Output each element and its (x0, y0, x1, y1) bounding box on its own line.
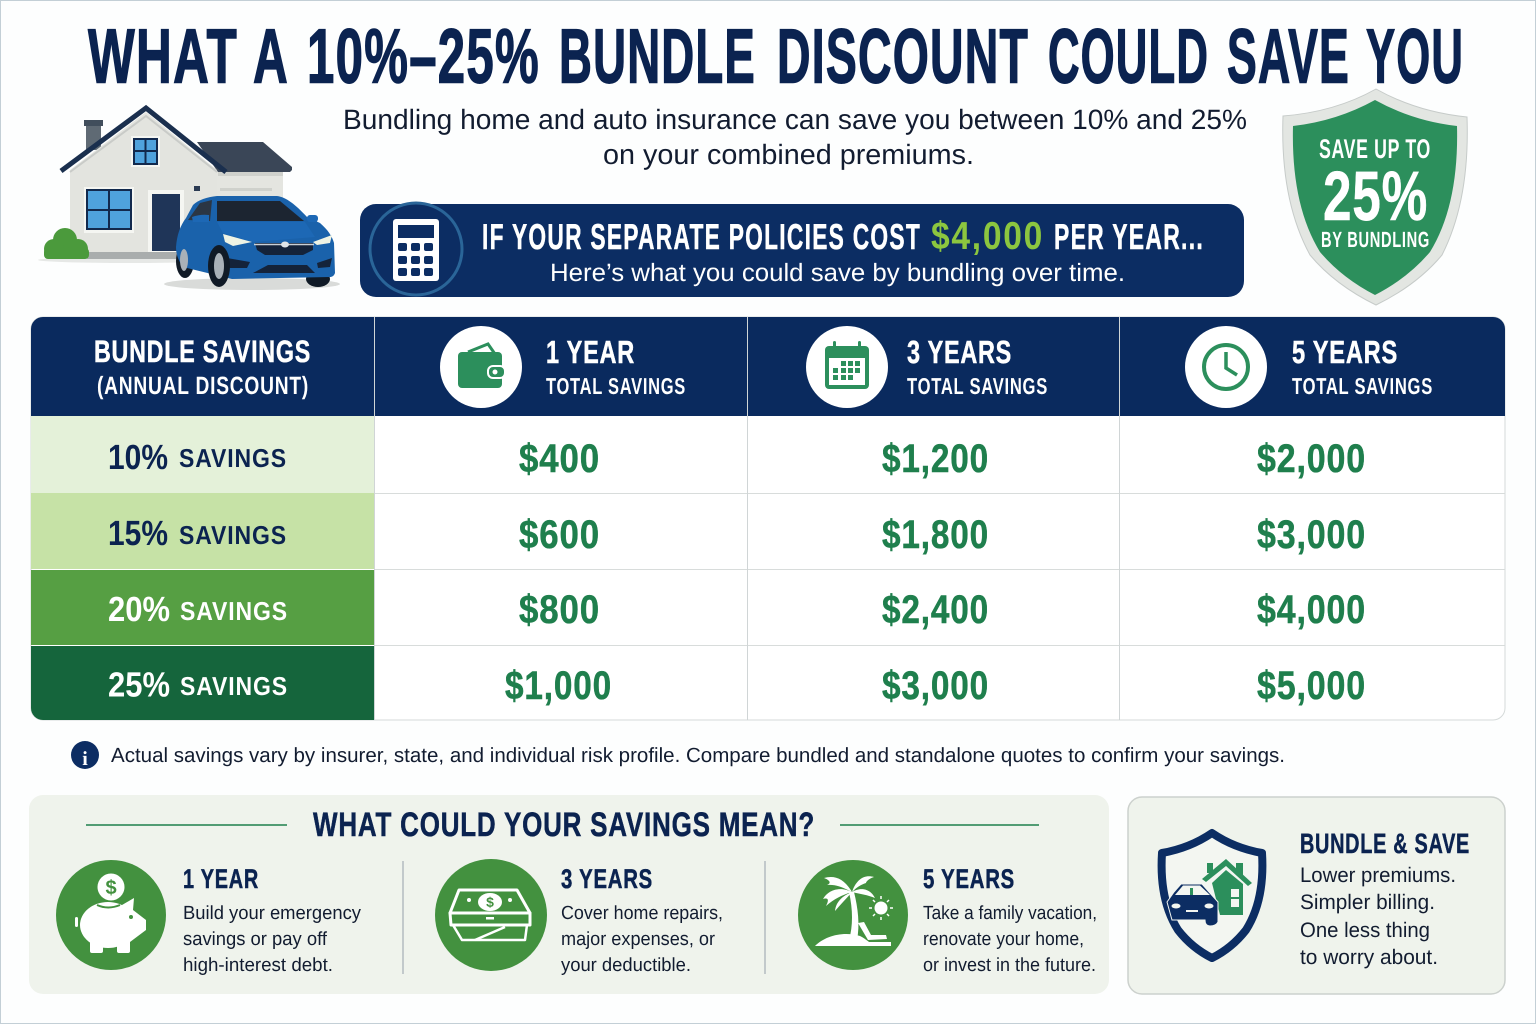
item: 5 years (798, 860, 1097, 976)
row: 20% savings: 20% (108, 590, 170, 629)
header: bundle savings: (ANNUAL DISCOUNT) (97, 372, 309, 400)
item: 3 years: your deductible. (561, 955, 691, 976)
row: 25% savings: $1,000 (505, 664, 612, 708)
header: 1 year: TOTAL SAVINGS (546, 373, 686, 399)
icon: calendar (825, 341, 869, 389)
banner headline: PER YEAR... (1054, 216, 1204, 257)
row: 25% savings: SAVINGS (180, 671, 288, 701)
row: 10% savings: $1,200 (882, 437, 989, 481)
icon: palm tree island (815, 876, 893, 946)
panel: bundle and save: One less thing (1300, 919, 1430, 942)
item: 1 year: savings or pay off (183, 929, 328, 950)
disclaimer note: Actual savings vary by insurer, state, and individual risk profile. Compare bundled and standalone quotes to confirm your savings. (111, 744, 1285, 767)
icon: house and car (38, 108, 340, 290)
row: 20% savings (108, 588, 1366, 632)
header: 5 years (1185, 326, 1433, 408)
header: 5 years: 5 YEARS (1292, 334, 1398, 370)
item: 5 years: 5 YEARS (923, 864, 1015, 894)
item: 1 year: 1 YEAR (183, 864, 259, 894)
item: 1 year: high-interest debt. (183, 955, 333, 976)
panel: bundle and save (1128, 797, 1505, 994)
title: SAVE (1227, 14, 1350, 100)
header: 3 years (806, 326, 1048, 408)
row: 15% savings: 15% (108, 514, 168, 553)
subtitle: Bundling home and auto insurance can save you between 10% and 25% (343, 104, 1247, 135)
item: 3 years: major expenses, or (561, 929, 716, 950)
title: DISCOUNT (777, 14, 1029, 100)
row: 10% savings: SAVINGS (179, 443, 287, 473)
disclaimer note: i (82, 748, 88, 770)
row: 25% savings: 25% (108, 666, 170, 704)
banner subline: Here’s what you could save by bundling over time. (550, 259, 1125, 287)
badge: save up to 25%: SAVE UP TO (1319, 134, 1431, 164)
icon: piggy bank (75, 874, 146, 953)
icon: cash stack (450, 890, 530, 940)
savings table (31, 317, 1505, 720)
item: 3 years: Cover home repairs, (561, 903, 723, 924)
title: A (253, 14, 289, 100)
row: 15% savings: $3,000 (1257, 513, 1366, 557)
header: 5 years: TOTAL SAVINGS (1292, 373, 1433, 399)
item: 5 years: or invest in the future. (923, 955, 1096, 976)
row: 20% savings: SAVINGS (180, 596, 288, 626)
badge: save up to 25% (1283, 89, 1467, 305)
icon: piggy bank: $ (105, 877, 117, 899)
row: 15% savings (108, 513, 1366, 557)
header: 3 years: TOTAL SAVINGS (907, 373, 1048, 399)
item: 1 year: Build your emergency (183, 903, 361, 924)
row: 10% savings: $400 (519, 437, 600, 481)
panel: bundle and save: to worry about. (1300, 946, 1438, 969)
subtitle (343, 104, 1247, 170)
panel: bundle and save: BUNDLE & SAVE (1300, 828, 1470, 859)
header: 3 years: 3 YEARS (907, 334, 1012, 370)
panel: bundle and save: Lower premiums. (1300, 864, 1456, 887)
badge: save up to 25%: 25% (1323, 157, 1428, 235)
row: 15% savings: $1,800 (882, 513, 989, 557)
subtitle: on your combined premiums. (603, 139, 974, 170)
header: 1 year: 1 YEAR (546, 334, 635, 370)
banner headline: $4,000 (931, 215, 1044, 258)
row: 25% savings (108, 664, 1366, 708)
title: BUNDLE (559, 14, 756, 100)
panel: bundle and save: Simpler billing. (1300, 891, 1435, 914)
item: 3 years: 3 YEARS (561, 864, 653, 894)
row: 15% savings: $600 (519, 513, 600, 557)
row: 20% savings: $4,000 (1257, 588, 1366, 632)
panel: cost banner (360, 203, 1244, 297)
row: 10% savings: $2,000 (1257, 437, 1366, 481)
row: 25% savings: $3,000 (882, 664, 989, 708)
icon: calculator (370, 203, 462, 295)
header: bundle savings (94, 334, 311, 400)
item: 5 years: renovate your home, (923, 929, 1084, 950)
icon: cash stack: $ (486, 894, 494, 910)
header: bundle savings: BUNDLE SAVINGS (94, 334, 311, 369)
banner headline: IF YOUR SEPARATE POLICIES COST (482, 216, 921, 257)
section heading: WHAT COULD YOUR SAVINGS MEAN? (313, 806, 815, 844)
item: 5 years: Take a family vacation, (923, 903, 1097, 924)
row: 10% savings (108, 437, 1366, 481)
title: COULD (1048, 14, 1209, 100)
row: 20% savings: $800 (519, 588, 600, 632)
row: 25% savings: $5,000 (1257, 664, 1366, 708)
icon: shield with house and car (1162, 833, 1262, 958)
item: 3 years (435, 859, 723, 976)
title: WHAT (88, 14, 238, 100)
row: 10% savings: 10% (108, 438, 168, 477)
row: 15% savings: SAVINGS (179, 520, 287, 550)
item: 1 year (56, 860, 361, 976)
title (88, 14, 1464, 100)
icon: wallet (458, 344, 505, 388)
header: 1 year (440, 326, 686, 408)
row: 20% savings: $2,400 (882, 588, 989, 632)
panel: what could your savings mean (29, 795, 1109, 994)
icon: clock (1204, 345, 1248, 389)
title: YOU (1366, 14, 1464, 100)
badge: save up to 25%: BY BUNDLING (1321, 227, 1430, 252)
title: 10%–25% (307, 14, 540, 100)
